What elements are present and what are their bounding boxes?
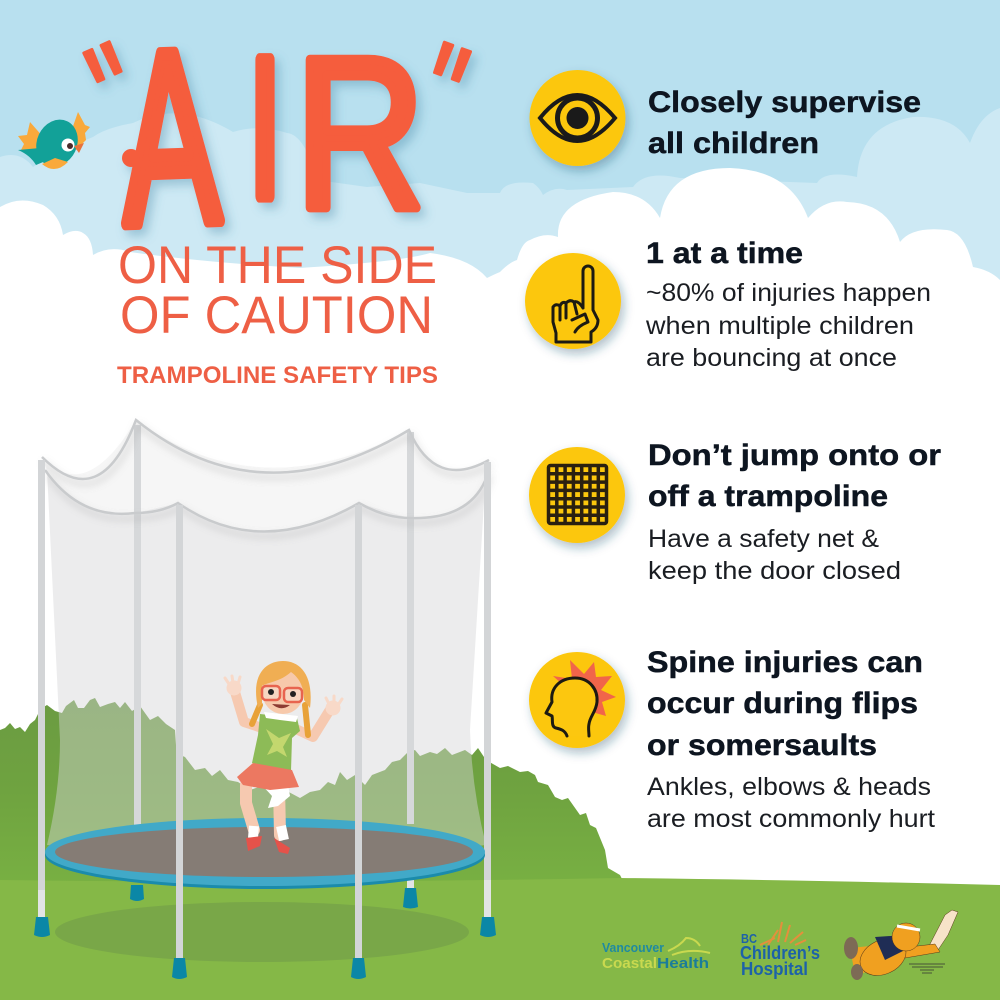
logo: bandaged bear	[844, 910, 958, 983]
letter A: A	[117, 0, 223, 276]
subtitle	[117, 236, 438, 389]
logo: BC Children's Hospital	[740, 922, 820, 979]
arms	[235, 692, 331, 737]
heading line 2: off a trampoline	[648, 480, 888, 513]
skirt	[237, 763, 299, 790]
smile	[272, 704, 290, 708]
net top hem	[42, 420, 489, 479]
glasses	[262, 686, 302, 702]
socks	[253, 826, 284, 840]
logo: Vancouver Coastal Health: Coastal	[602, 955, 657, 972]
eyes	[268, 689, 274, 695]
grass ground	[0, 878, 1000, 1000]
heading line 2: occur during flips	[647, 687, 918, 720]
side poles	[38, 460, 491, 920]
icon: net grid	[529, 447, 625, 543]
back poles and feet	[130, 425, 418, 908]
tagline: TRAMPOLINE SAFETY TIPS	[117, 362, 438, 389]
body line 3: are bouncing at once	[646, 344, 897, 372]
hands with fingers	[225, 676, 342, 714]
body line 2: keep the door closed	[648, 557, 901, 585]
tip 4: spine injuries	[529, 646, 935, 833]
trampoline shadow on grass	[55, 902, 469, 962]
letter R: R	[295, 14, 425, 254]
logo: BC Children's Hospital: Hospital	[741, 959, 808, 979]
heading: Spine injuries can	[647, 646, 923, 679]
heading: Don’t jump onto or	[648, 439, 941, 472]
subtitle line 2: OF CAUTION	[120, 286, 433, 345]
body line 2: when multiple children	[645, 312, 914, 340]
hair	[256, 661, 311, 708]
letter A crossbar bump	[122, 149, 140, 167]
icon: head with impact burst	[529, 652, 625, 748]
closing quote: "	[395, 11, 486, 176]
heading: 1 at a time	[646, 237, 803, 270]
braids	[252, 705, 308, 735]
subtitle line 1: ON THE SIDE	[118, 236, 437, 295]
letter I: I	[248, 17, 282, 238]
girl jumping	[225, 661, 342, 854]
collar	[264, 712, 298, 722]
logo: BC Children's Hospital: Children’s	[740, 943, 820, 963]
rim and mat	[45, 818, 485, 889]
shoes	[246, 836, 290, 854]
logo: Vancouver Coastal Health: Health	[657, 955, 709, 972]
heading line 3: or somersaults	[647, 729, 877, 762]
tip 2: one at a time	[525, 237, 931, 372]
mountain mark	[668, 938, 710, 955]
logo: BC Children's Hospital: BC	[741, 931, 758, 946]
trampoline with safety net	[38, 420, 491, 920]
tip 3: safety net	[529, 439, 941, 585]
body line 2: are most commonly hurt	[647, 805, 935, 833]
body line 1: ~80% of injuries happen	[646, 279, 931, 307]
body line 1: Have a safety net &	[648, 525, 879, 553]
shirt	[252, 714, 300, 771]
net mesh	[47, 470, 486, 870]
front poles and feet	[34, 505, 496, 979]
logo: Vancouver Coastal Health: Vancouver	[602, 940, 664, 955]
heading line 2: all children	[648, 127, 819, 160]
opening quote: "	[67, 11, 167, 175]
face	[262, 670, 304, 714]
bird icon	[18, 112, 90, 173]
legs	[246, 785, 280, 835]
hedge behind trampoline	[0, 698, 625, 885]
tip 1: supervise	[530, 70, 921, 166]
pale background clouds	[0, 108, 1000, 320]
heading: Closely supervise	[648, 86, 921, 119]
body line 1: Ankles, elbows & heads	[647, 773, 931, 801]
net upper band	[42, 420, 489, 532]
title: AIR	[67, 0, 486, 276]
icon: eye	[530, 70, 626, 166]
petticoat	[262, 785, 290, 808]
icon: pointing hand	[525, 253, 621, 349]
sun rays	[760, 922, 806, 945]
net lower hem	[45, 470, 489, 532]
shirt butterfly	[266, 729, 291, 757]
logo: Vancouver Coastal Health	[602, 938, 710, 972]
